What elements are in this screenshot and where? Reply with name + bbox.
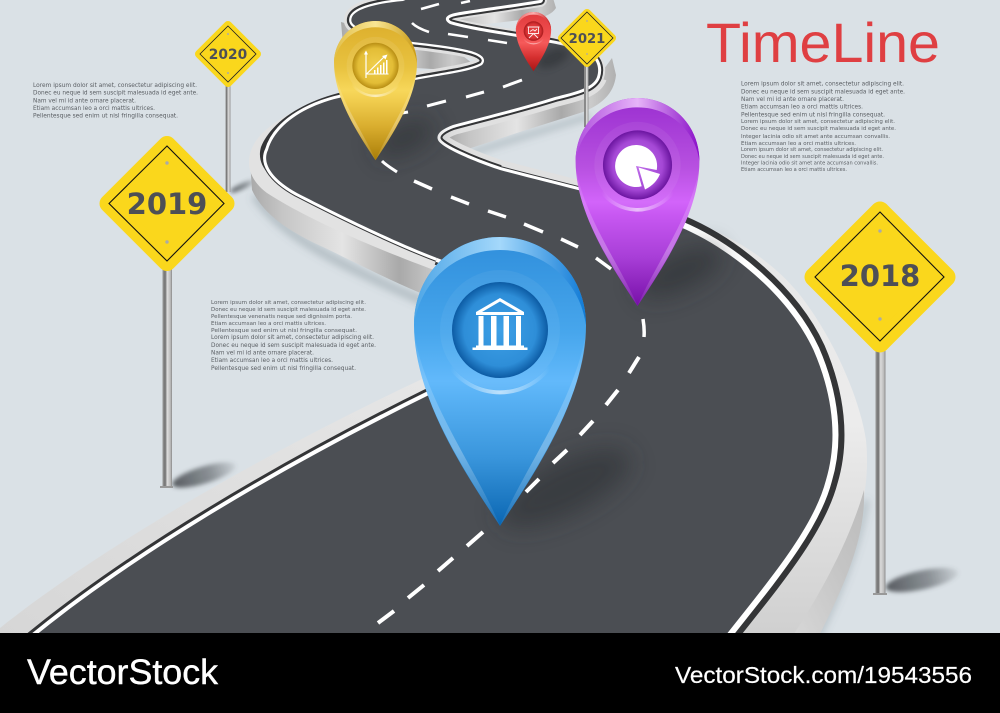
label 2020: 2020 xyxy=(209,47,247,63)
pin: blue (bank) xyxy=(414,237,586,526)
text block: upper right: Etiam accumsan leo a orci mattis ultrices. xyxy=(741,105,863,111)
footer brand: VectorStock xyxy=(27,653,219,692)
text block: centre left: Pellentesque venenatis neque sed dignissim porta. xyxy=(211,314,352,320)
diamond 2018 xyxy=(814,211,946,343)
text block: upper left: Etiam accumsan leo a orci mattis ultrices. xyxy=(33,106,155,112)
icon: presentation board xyxy=(528,27,540,38)
road centre dashes xyxy=(378,1,644,623)
text block: upper right: Nam vel mi id ante ornare placerat. xyxy=(741,97,844,103)
far curbs xyxy=(343,0,680,227)
road edge dark lines xyxy=(30,0,832,640)
post 2019 xyxy=(162,268,172,487)
post 2020 xyxy=(226,85,230,192)
road side walls xyxy=(250,0,616,310)
text block: upper right: Donec eu neque id sem suscipit malesuada id eget ante. xyxy=(741,89,905,95)
label 2019: 2019 xyxy=(127,187,207,221)
text block: upper right: Etiam accumsan leo a orci mattis ultrices. xyxy=(741,167,847,173)
icon: bank building xyxy=(472,298,528,350)
sign: 2018 xyxy=(814,211,946,595)
text block: upper left: Pellentesque sed enim ut nisl fringilla consequat. xyxy=(33,114,178,120)
diamond 2020 xyxy=(199,25,257,83)
post 2018 xyxy=(876,349,886,594)
text block: upper right: Donec eu neque id sem suscipit malesuada id eget ante. xyxy=(741,126,896,132)
text block: upper right: Etiam accumsan leo a orci mattis ultrices. xyxy=(741,141,856,147)
text block: upper left: Donec eu neque id sem suscipit malesuada id eget ante. xyxy=(33,90,198,96)
text block: upper right: Donec eu neque id sem suscipit malesuada id eget ante. xyxy=(741,154,884,160)
text block: upper right: Lorem ipsum dolor sit amet, consectetur adipiscing elit. xyxy=(741,147,883,153)
text block: upper right: Integer lacinia odio sit amet ante accumsan convallis. xyxy=(741,134,890,140)
sign: 2019 xyxy=(108,145,226,488)
thick dark edge at left bend xyxy=(260,92,343,195)
sign post shadows xyxy=(170,177,960,597)
near left curb xyxy=(0,350,490,640)
text block: upper left: Nam vel mi id ante ornare placerat. xyxy=(33,98,136,104)
post 2021 xyxy=(584,65,588,127)
diamond 2019 xyxy=(108,145,226,262)
text block: centre left: Lorem ipsum dolor sit amet, consectetur adipiscing elit. xyxy=(211,335,374,341)
near right curb xyxy=(650,205,867,640)
text block: centre left: Nam vel mi id ante ornare placerat. xyxy=(211,350,314,356)
road edge white lines xyxy=(30,0,832,640)
pin shadows xyxy=(371,44,729,543)
text block: centre left: Pellentesque sed enim ut nisl fringilla consequat. xyxy=(211,328,357,334)
sign: 2021 xyxy=(561,12,613,127)
road wall shadows xyxy=(255,116,866,640)
label 2021: 2021 xyxy=(569,32,605,47)
road surface xyxy=(30,0,832,640)
text block: centre left xyxy=(211,300,376,372)
title: TimeLine xyxy=(706,11,940,74)
text block: centre left: Etiam accumsan leo a orci mattis ultrices. xyxy=(211,358,333,364)
text block: upper left xyxy=(33,83,198,120)
diamond 2021 xyxy=(562,13,612,63)
middle left curb xyxy=(249,93,440,272)
pin: red (presentation) xyxy=(516,12,551,71)
text block: centre left: Etiam accumsan leo a orci mattis ultrices. xyxy=(211,321,326,327)
label 2018: 2018 xyxy=(840,259,920,293)
icon: growth chart xyxy=(364,50,388,78)
text block: centre left: Pellentesque sed enim ut nisl fringilla consequat. xyxy=(211,366,356,372)
pin: purple (pie chart) xyxy=(576,98,699,306)
pin: gold (chart) xyxy=(334,21,417,160)
text block: upper left: Lorem ipsum dolor sit amet, consectetur adipiscing elit. xyxy=(33,83,197,89)
footer image id: VectorStock.com/19543556 xyxy=(675,662,972,688)
text block: upper right: Integer lacinia odio sit amet ante accumsan convallis. xyxy=(741,161,878,167)
text block: upper right xyxy=(741,82,905,173)
text block: centre left: Donec eu neque id sem suscipit malesuada id eget ante. xyxy=(211,343,376,349)
text block: upper right: Pellentesque sed enim ut nisl fringilla consequat. xyxy=(741,112,885,118)
text block: centre left: Donec eu neque id sem suscipit malesuada id eget ante. xyxy=(211,307,366,313)
road: winding highway xyxy=(0,0,867,640)
sign: 2020 xyxy=(199,25,257,192)
text block: upper right: Lorem ipsum dolor sit amet, consectetur adipiscing elit. xyxy=(741,119,895,125)
text block: upper right: Lorem ipsum dolor sit amet, consectetur adipiscing elit. xyxy=(741,82,904,88)
text block: centre left: Lorem ipsum dolor sit amet, consectetur adipiscing elit. xyxy=(211,300,366,306)
footer band xyxy=(0,633,1000,713)
near right wall xyxy=(790,490,864,640)
icon: pie chart xyxy=(615,145,660,190)
